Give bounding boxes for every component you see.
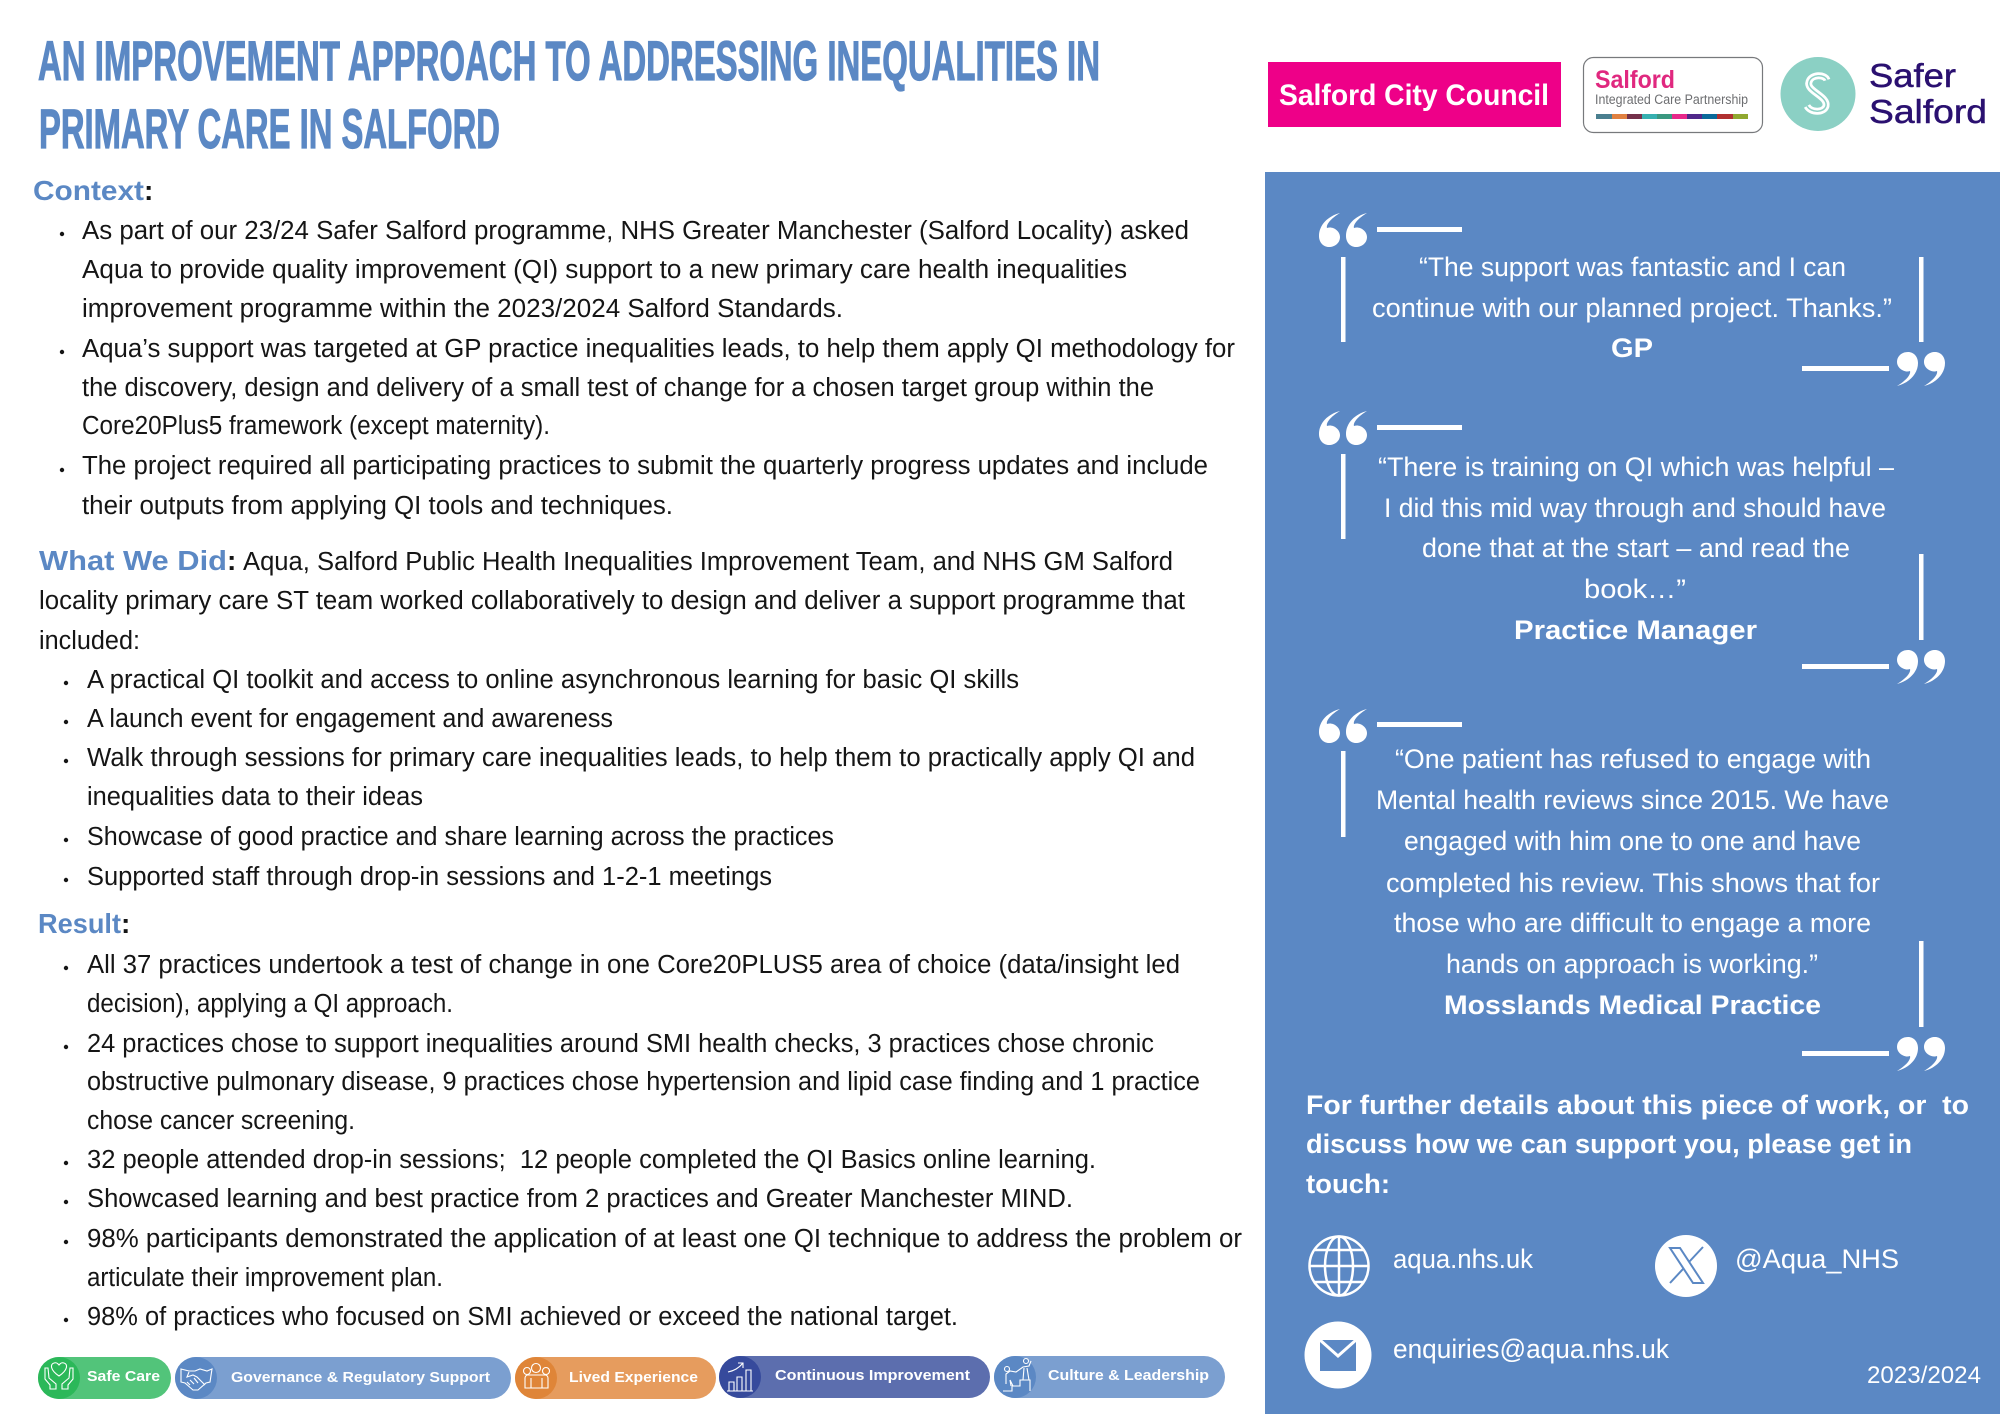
contact: X handle: @Aqua_NHS <box>1735 1244 1899 1274</box>
heading and introduction: what we did: : <box>227 545 236 576</box>
logo: Salford Integrated Care Partnership: Salford <box>1595 66 1675 94</box>
bullet list: result: Showcased learning and best practice from 2 practices and Greater Manchester MIND. <box>87 1185 1073 1213</box>
quote: Mosslands Medical Practice <box>1319 709 1945 1071</box>
bullet list: result: articulate their improvement plan. <box>87 1264 443 1292</box>
call to action: touch: <box>1306 1169 1390 1199</box>
icon: opening quote mark <box>1319 411 1367 445</box>
bullet list: what we did: A launch event for engagement and awareness <box>87 705 613 733</box>
pill: governance and regulatory support <box>175 1357 511 1399</box>
contact: email <box>1304 1322 1669 1388</box>
heading: result: : <box>121 908 130 939</box>
quote text: GP <box>1372 252 1892 363</box>
bullet list: result: All 37 practices undertook a test of change in one Core20PLUS5 area of choice (data/insight led <box>87 951 1180 979</box>
bullet list: context: improvement programme within the 2023/2024 Salford Standards. <box>82 295 843 323</box>
quote text: Practice Manager: I did this mid way through and should have <box>1384 493 1886 523</box>
bullet list: result: chose cancer screening. <box>87 1107 355 1135</box>
pill: lived experience: Lived Experience <box>569 1370 698 1386</box>
bullet list: result: decision), applying a QI approach. <box>87 990 453 1018</box>
logo: Safer Salford: Safer <box>1869 57 1956 94</box>
call to action: discuss how we can support you, please get in <box>1306 1129 1912 1159</box>
pill: lived experience <box>515 1357 716 1399</box>
quote: GP <box>1319 213 1945 386</box>
quote text: Mosslands Medical Practice: hands on approach is working.” <box>1446 949 1818 979</box>
bullet list: result <box>64 951 1243 1331</box>
quote: Practice Manager <box>1319 411 1945 684</box>
bullet list: what we did: Supported staff through drop-in sessions and 1-2-1 meetings <box>87 863 772 891</box>
pill: culture and leadership: Culture & Leadership <box>1048 1368 1209 1384</box>
bullet list: context: Aqua’s support was targeted at GP practice inequalities leads, to help them apply QI methodology for <box>82 335 1235 363</box>
heading and introduction: what we did: included: <box>39 627 140 655</box>
bullet list: what we did: inequalities data to their ideas <box>87 783 423 811</box>
quote text: Practice Manager: book…” <box>1584 574 1686 604</box>
icon: opening quote mark <box>1319 709 1367 743</box>
bullet list: what we did: A practical QI toolkit and access to online asynchronous learning for basic QI skills <box>87 666 1019 694</box>
panel: result <box>38 908 1243 1331</box>
heading: context: Context <box>33 175 144 206</box>
bullet list: result: obstructive pulmonary disease, 9 practices chose hypertension and lipid case finding and 1 practice <box>87 1068 1200 1096</box>
call to action: For further details about this piece of work, or to <box>1306 1090 1969 1120</box>
icon: closing quote mark <box>1897 650 1945 684</box>
panel: what we did <box>39 545 1195 891</box>
heading: context: : <box>144 175 153 206</box>
heading and introduction: what we did: What We Did <box>39 545 227 576</box>
date: 2023/2024 <box>1867 1362 1981 1389</box>
heading and introduction: what we did: locality primary care ST team worked collaboratively to design and deliver a support programme that <box>39 587 1185 615</box>
pill: culture and leadership <box>994 1356 1225 1398</box>
contact: email: enquiries@aqua.nhs.uk <box>1393 1334 1669 1364</box>
quote text: Practice Manager: Practice Manager <box>1514 615 1758 645</box>
pill: continuous improvement <box>719 1356 990 1398</box>
pill: safe care <box>38 1357 171 1399</box>
quote text: GP: GP <box>1611 333 1653 363</box>
logo: Salford Integrated Care Partnership: Integrated Care Partnership <box>1595 92 1748 107</box>
bullet list: context: the discovery, design and delivery of a small test of change for a chosen target group within the <box>82 374 1154 402</box>
pill: continuous improvement: Continuous Improvement <box>775 1368 970 1384</box>
quote text: Mosslands Medical Practice: those who are difficult to engage a more <box>1394 908 1871 938</box>
heading and introduction: what we did: Aqua, Salford Public Health Inequalities Improvement Team, and NHS GM Salford <box>243 548 1173 576</box>
bullet list: context: Aqua to provide quality improvement (QI) support to a new primary care health inequalities <box>82 256 1127 284</box>
heading: result: Result <box>38 908 121 939</box>
quote text: Practice Manager: done that at the start – and read the <box>1422 533 1850 563</box>
bullet list: context <box>60 217 1235 520</box>
quote text: Mosslands Medical Practice: Mental health reviews since 2015. We have <box>1376 785 1889 815</box>
pill: safe care: Safe Care <box>87 1369 160 1385</box>
logo: Salford Integrated Care Partnership <box>1584 58 1762 132</box>
heading and introduction: what we did <box>39 545 1185 655</box>
quote text: Practice Manager: “There is training on QI which was helpful – <box>1378 452 1894 482</box>
bullet list: what we did <box>64 666 1195 891</box>
bullet list: context: Core20Plus5 framework (except maternity). <box>82 412 550 440</box>
bullet list: context: The project required all participating practices to submit the quarterly progress updates and include <box>82 452 1208 480</box>
icon: opening quote mark <box>1319 213 1367 247</box>
quote text: GP: continue with our planned project. Thanks.” <box>1372 293 1892 323</box>
panel: context <box>33 175 1235 520</box>
title: PRIMARY CARE IN SALFORD <box>39 97 500 160</box>
title <box>38 29 1100 160</box>
quote text: Mosslands Medical Practice: “One patient has refused to engage with <box>1395 744 1871 774</box>
logo: Salford City Council <box>1268 62 1561 127</box>
bullet list: context: As part of our 23/24 Safer Salford programme, NHS Greater Manchester (Salford Locality) asked <box>82 217 1189 245</box>
panel: testimonials and contact <box>1265 172 2000 1414</box>
contact: X handle <box>1655 1235 1899 1297</box>
quote text: Mosslands Medical Practice: engaged with him one to one and have <box>1404 826 1861 856</box>
icon: closing quote mark <box>1897 352 1945 386</box>
pill: governance and regulatory support: Governance & Regulatory Support <box>231 1370 490 1386</box>
bullet list: what we did: Walk through sessions for primary care inequalities leads, to help them to practically apply QI and <box>87 744 1195 772</box>
bullet list: context: their outputs from applying QI tools and techniques. <box>82 492 673 520</box>
logo: Salford City Council: Salford City Council <box>1279 79 1549 112</box>
logo: Safer Salford <box>1780 57 1987 131</box>
quote text: Mosslands Medical Practice: completed his review. This shows that for <box>1386 868 1880 898</box>
bullet list: what we did: Showcase of good practice and share learning across the practices <box>87 823 834 851</box>
contact: website <box>1310 1236 1533 1296</box>
quote text: Mosslands Medical Practice <box>1376 744 1889 1020</box>
bullet list: result: 24 practices chose to support inequalities around SMI health checks, 3 practices chose chronic <box>87 1030 1154 1058</box>
title: AN IMPROVEMENT APPROACH TO ADDRESSING INEQUALITIES IN <box>38 29 1100 92</box>
quote text: GP: “The support was fantastic and I can <box>1419 252 1846 282</box>
call to action <box>1306 1090 1969 1199</box>
legend: theme pills <box>38 1356 1225 1399</box>
bullet list: result: 98% participants demonstrated the application of at least one QI technique to address the problem or <box>87 1225 1243 1253</box>
bullet list: result: 98% of practices who focused on SMI achieved or exceed the national target. <box>87 1303 958 1331</box>
contact: website: aqua.nhs.uk <box>1393 1244 1533 1274</box>
quote text: Mosslands Medical Practice: Mosslands Medical Practice <box>1444 990 1821 1020</box>
quote text: Practice Manager <box>1378 452 1894 645</box>
bullet list: result: 32 people attended drop-in sessions; 12 people completed the QI Basics online learning. <box>87 1146 1096 1174</box>
icon: closing quote mark <box>1897 1037 1945 1071</box>
logo: Safer Salford: Salford <box>1869 93 1987 130</box>
